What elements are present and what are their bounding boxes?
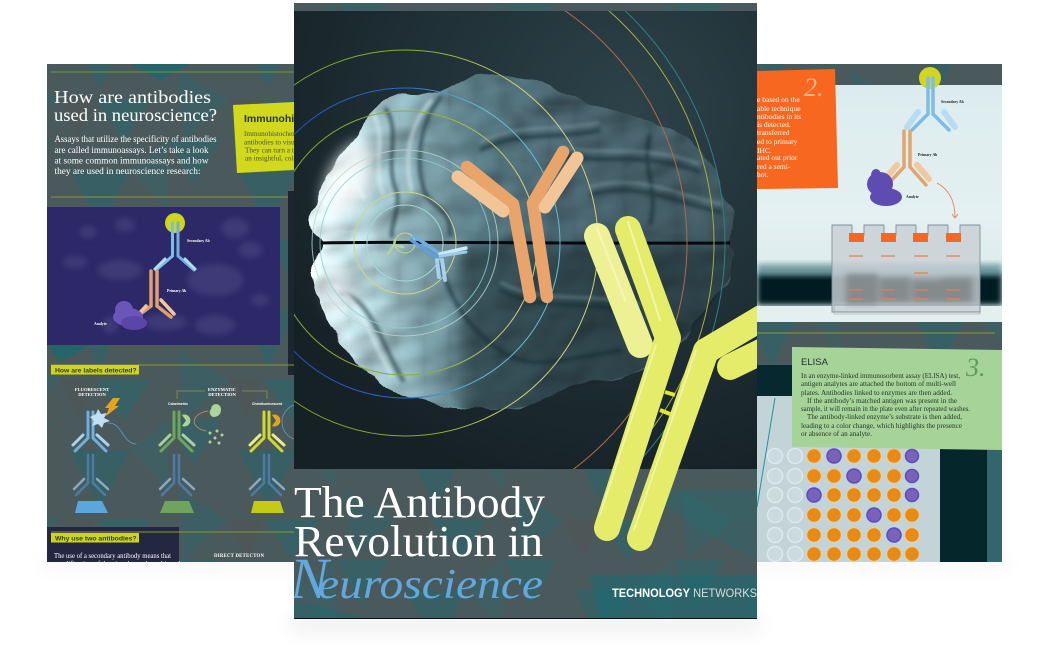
icon: chemiluminescent antibodies: [248, 404, 294, 496]
yellow note: immunohistochemistry: antibodies to visualize: [244, 138, 308, 146]
labels: Primary Ab: [167, 289, 186, 293]
icon: tiny green antibody: [388, 240, 403, 254]
numeral 2: 2.: [804, 73, 824, 102]
arrow: [937, 183, 958, 218]
icon: analyte protein: [867, 169, 902, 206]
panel: right page western blot and ELISA: [757, 64, 1002, 562]
green note: ELISA: ELISA: [801, 357, 829, 368]
dark block behind plate: [757, 365, 1002, 562]
icon: fluorophore burst: [90, 409, 110, 428]
label: fluorescent detection: DETECTION: [78, 392, 106, 397]
label: fluorescent detection: FLUORESCENT: [75, 387, 109, 392]
icon: yellow label circle: [165, 213, 185, 233]
title script word: euroscience: [318, 562, 543, 608]
panel: why use two antibodies: DIRECT DETECTON: [214, 554, 265, 559]
green note: ELISA: If the antibody’s matched antigen was present in the: [807, 396, 957, 405]
label: fluorescent detection: [74, 388, 282, 405]
intro paragraph: are called immunoassays. Let’s take a look: [54, 145, 209, 156]
logo: Technology Networks: TECHNOLOGY NETWORKS: [612, 588, 757, 600]
icon: primary antibody: [885, 131, 929, 185]
label: fluorescent detection: Colorimetric: [168, 402, 188, 406]
green note: ELISA: plates. Antibodies linked to enzymes are then added.: [801, 388, 952, 397]
label: fluorescent detection: ENZYMATIC: [208, 387, 236, 392]
orange note: western blot: ed to primary: [757, 137, 798, 146]
yellow note: immunohistochemistry: [233, 102, 294, 173]
labels: Secondary Ab: [941, 100, 964, 104]
panel: centre cover: [85, 0, 775, 619]
yellow note: immunohistochemistry: an insightful, colorful map: [245, 154, 322, 162]
icon: primary antibody: [135, 271, 174, 318]
panel: why use two antibodies: The use of a secondary antibody means that: [54, 552, 171, 560]
yellow antibody hinge: [660, 392, 675, 414]
drop shadows: [40, 558, 1010, 630]
orange wells: [806, 448, 920, 562]
icon: fluorescent detection antibodies: [73, 412, 136, 495]
yellow note: immunohistochemistry: Immunohistochemistry: [244, 113, 360, 125]
ELISA plate photo: [757, 396, 940, 562]
intro paragraph: [54, 134, 217, 177]
green note: ELISA: In an enzyme-linked immunosorbent assay (ELISA) test,: [801, 371, 960, 380]
concentric rings: [85, 0, 725, 563]
icon: small blue antibody: [411, 236, 466, 280]
labels: Primary Ab: [918, 153, 937, 157]
brain highlights: [313, 135, 383, 314]
green note: ELISA: The antibody-linked enzyme’s substrate is then added,: [807, 412, 962, 421]
yellow note: immunohistochemistry: Immunohistochemistry uses: [244, 130, 325, 138]
icon: enzyme and substrate dots: [182, 404, 224, 444]
title script word: N: [289, 546, 332, 611]
blot photo background: [757, 85, 1002, 322]
heading line two: used in neuroscience?: [54, 105, 217, 125]
icon: secondary antibody: [155, 223, 195, 270]
dark panel edge: [288, 191, 294, 375]
labels: Analyte: [906, 195, 919, 199]
labels: [94, 239, 210, 326]
orange note: western blot: hot.: [757, 170, 769, 179]
panel: why use two antibodies: amplification of the signals can be achieved: [54, 560, 181, 568]
panel: why use two antibodies: Why use two antibodies?: [55, 536, 137, 542]
title: Revolution in: [294, 517, 543, 566]
orange note: western blot: ated out prior: [757, 153, 798, 162]
icon: orange antibody: [458, 152, 577, 297]
orange note: western blot: ntibodies in its: [757, 112, 801, 121]
icon: coloured bases: [75, 501, 284, 513]
orange note: western blot: e based on the: [757, 95, 800, 104]
label: fluorescent detection: DETECTION: [208, 392, 236, 397]
orange note: western blot: transferred: [757, 128, 790, 137]
purple panel: sandwich antibody: [47, 207, 280, 345]
icon: secondary antibody: [907, 78, 955, 130]
icon: lightning bolt: [105, 398, 120, 416]
title: The Antibody: [294, 478, 545, 527]
intro paragraph: at some common immunoassays and how: [54, 156, 209, 166]
brain: [313, 75, 750, 416]
yellow note: immunohistochemistry: They can turn a tissue into: [245, 146, 321, 154]
green note: ELISA: [792, 347, 1002, 450]
purple wells: [807, 449, 918, 542]
icon: yellow label circle: [919, 67, 941, 89]
icon: colorimetric antibodies: [160, 411, 208, 495]
orange note: western blot: [757, 69, 838, 189]
bottom band pattern: [294, 490, 757, 619]
labels: Secondary Ab: [187, 239, 210, 243]
section: how are labels detected: [51, 365, 294, 374]
heading: how are antibodies used: How are antibodies: [54, 87, 211, 107]
green note: ELISA: or absence of an analyte.: [801, 429, 872, 438]
icon: analyte protein: [113, 301, 147, 330]
label: fluorescent detection: Chemiluminescent: [252, 402, 283, 406]
intro paragraph: they are used in neuroscience research:: [54, 166, 200, 177]
gel diagram: [832, 225, 980, 314]
orange bands: [849, 256, 960, 299]
section: how are labels detected: How are labels detected?: [55, 368, 137, 374]
green note: ELISA: sample, it will remain in the plate even after repeated washes.: [801, 404, 970, 413]
green note: ELISA: leading to a color change, which highlights the presence: [801, 421, 962, 430]
orange note: western blot: red a semi-: [757, 162, 791, 171]
icon: large yellow antibody: [597, 222, 775, 538]
icon: enzyme chemiluminescent: [272, 414, 280, 427]
labels: Analyte: [94, 322, 107, 326]
panel: left page immunoassays: [47, 64, 294, 562]
green note: ELISA: antigen analytes are attached the bottom of multi-well: [801, 379, 956, 388]
title: [294, 478, 545, 566]
orange wells: [849, 233, 961, 242]
orange note: western blot: is detected.: [757, 120, 791, 129]
title script word: [289, 546, 543, 611]
labels: [906, 100, 964, 199]
orange note: western blot: IHC.: [757, 146, 772, 155]
bracket: enzymatic: [177, 391, 267, 399]
panel: why use two antibodies: [47, 527, 294, 562]
brain folds: [332, 96, 750, 416]
orange note: western blot: able technique: [757, 104, 801, 113]
intro paragraph: Assays that utilize the specificity of antibodies: [54, 134, 217, 145]
dark hero background: [294, 11, 757, 469]
numeral 3: 3.: [965, 353, 986, 382]
